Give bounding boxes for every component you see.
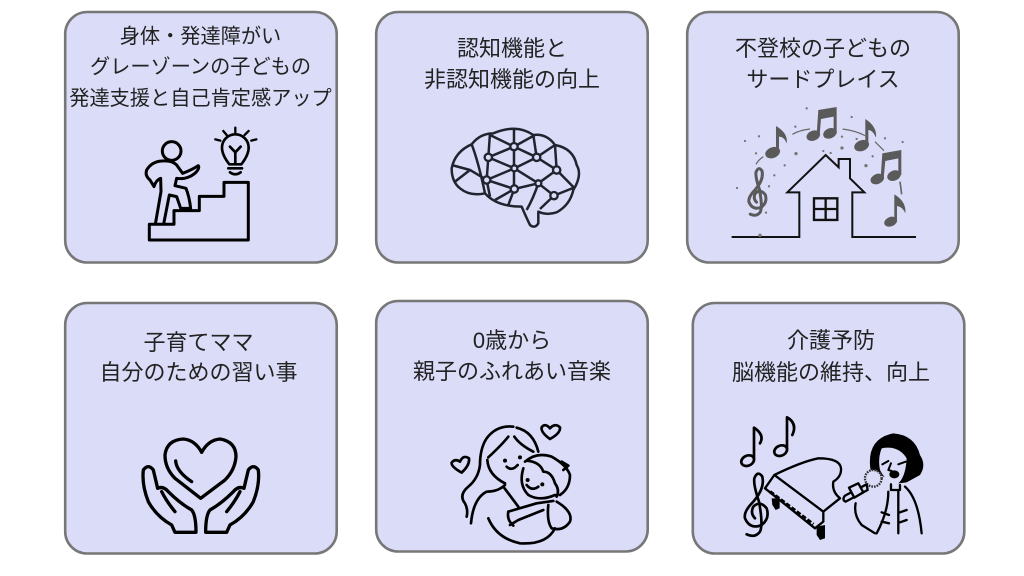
heading: parent and child music: 親子のふれあい音楽 [413,359,611,384]
panel: developmental support [65,12,337,262]
icon: woman singing with piano and notes [740,417,923,540]
icon: hands holding heart [143,439,259,532]
heading: developmental support: 発達支援と自己肯定感アップ [69,87,332,110]
heading: cognitive function: 非認知機能の向上 [424,67,600,92]
panel: parenting mothers [65,303,337,554]
panel: dementia prevention [693,303,964,554]
icon: person climbing stairs to a light bulb [146,128,256,240]
heading: dementia prevention: 脳機能の維持、向上 [732,360,930,385]
heading: parenting mothers: 自分のための習い事 [99,360,298,385]
heading: third place: サードプレイス [746,67,900,92]
icon: house with music notes [732,107,916,237]
icon: brain network [452,129,579,227]
panel: third place [687,12,959,262]
panel: parent and child music [376,301,648,552]
heading: cognitive function: 認知機能と [457,36,567,61]
heading: dementia prevention: 介護予防 [787,328,875,353]
heading: developmental support: グレーゾーンの子どもの [90,56,311,78]
heading: parenting mothers: 子育てママ [143,330,254,355]
heading: parent and child music: 0歳から [473,328,551,353]
heading: developmental support: 身体・発達障がい [120,25,281,48]
icon: mother hugging child [452,425,571,543]
heading: third place: 不登校の子どもの [735,36,911,61]
panel: cognitive function [376,12,648,262]
